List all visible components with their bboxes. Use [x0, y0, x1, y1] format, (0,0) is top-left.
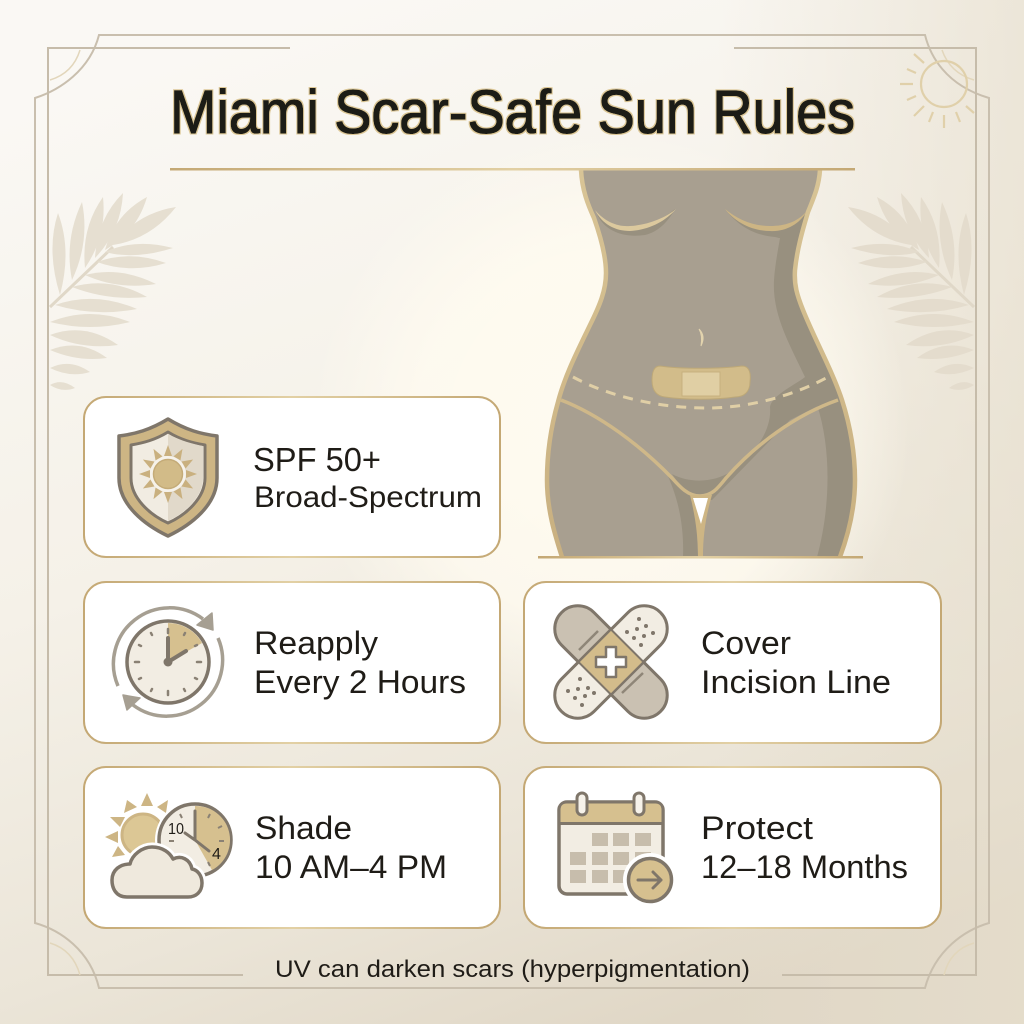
card text: 12–18 Months: [701, 849, 908, 885]
icon: crossed bandages: [545, 596, 677, 728]
icon: calendar with arrow: [559, 793, 677, 907]
dashed incision line: [573, 377, 828, 408]
title: Miami Scar-Safe Sun Rules: [170, 78, 855, 146]
palm leaf right: [848, 193, 974, 390]
card: SPF 50+: [84, 397, 500, 557]
card text: [253, 441, 482, 514]
card text: Every 2 Hours: [254, 664, 466, 700]
card text: [701, 810, 908, 885]
card text: Protect: [701, 810, 813, 846]
icon: sun, clock and cloud: [105, 793, 235, 897]
card text: Reapply: [254, 625, 378, 661]
bandage on incision: [652, 366, 750, 399]
card text: [254, 625, 466, 700]
baseline: [538, 556, 863, 558]
icon: decorative sun: [900, 54, 974, 128]
card: shade: [84, 767, 500, 928]
inner thigh gap: [690, 495, 712, 556]
palm leaf left: [50, 193, 176, 390]
card text: Incision Line: [701, 664, 891, 700]
illustration: torso with covered incision: [538, 170, 863, 560]
icon: clock with rotation arrows: [113, 608, 223, 716]
card text: Cover: [701, 625, 791, 661]
bikini line: [561, 400, 838, 496]
card text: Shade: [255, 810, 352, 846]
icon: shield with sun: [119, 419, 217, 536]
breast contour lines: [595, 209, 806, 231]
card text: [701, 625, 891, 700]
card text: 10 AM–4 PM: [255, 849, 447, 885]
card: reapply: [84, 582, 500, 743]
footer caption: UV can darken scars (hyperpigmentation): [275, 956, 750, 983]
card: protect: [524, 767, 941, 928]
card text: [255, 810, 447, 885]
card: cover incision: [524, 582, 941, 743]
icon: sun, clock and cloud: 10: [168, 821, 184, 838]
title rule: [170, 168, 855, 170]
card text: Broad-Spectrum: [254, 481, 482, 514]
icon: sun, clock and cloud: 4: [212, 846, 221, 863]
card text: SPF 50+: [253, 441, 381, 478]
navel: [699, 329, 703, 346]
